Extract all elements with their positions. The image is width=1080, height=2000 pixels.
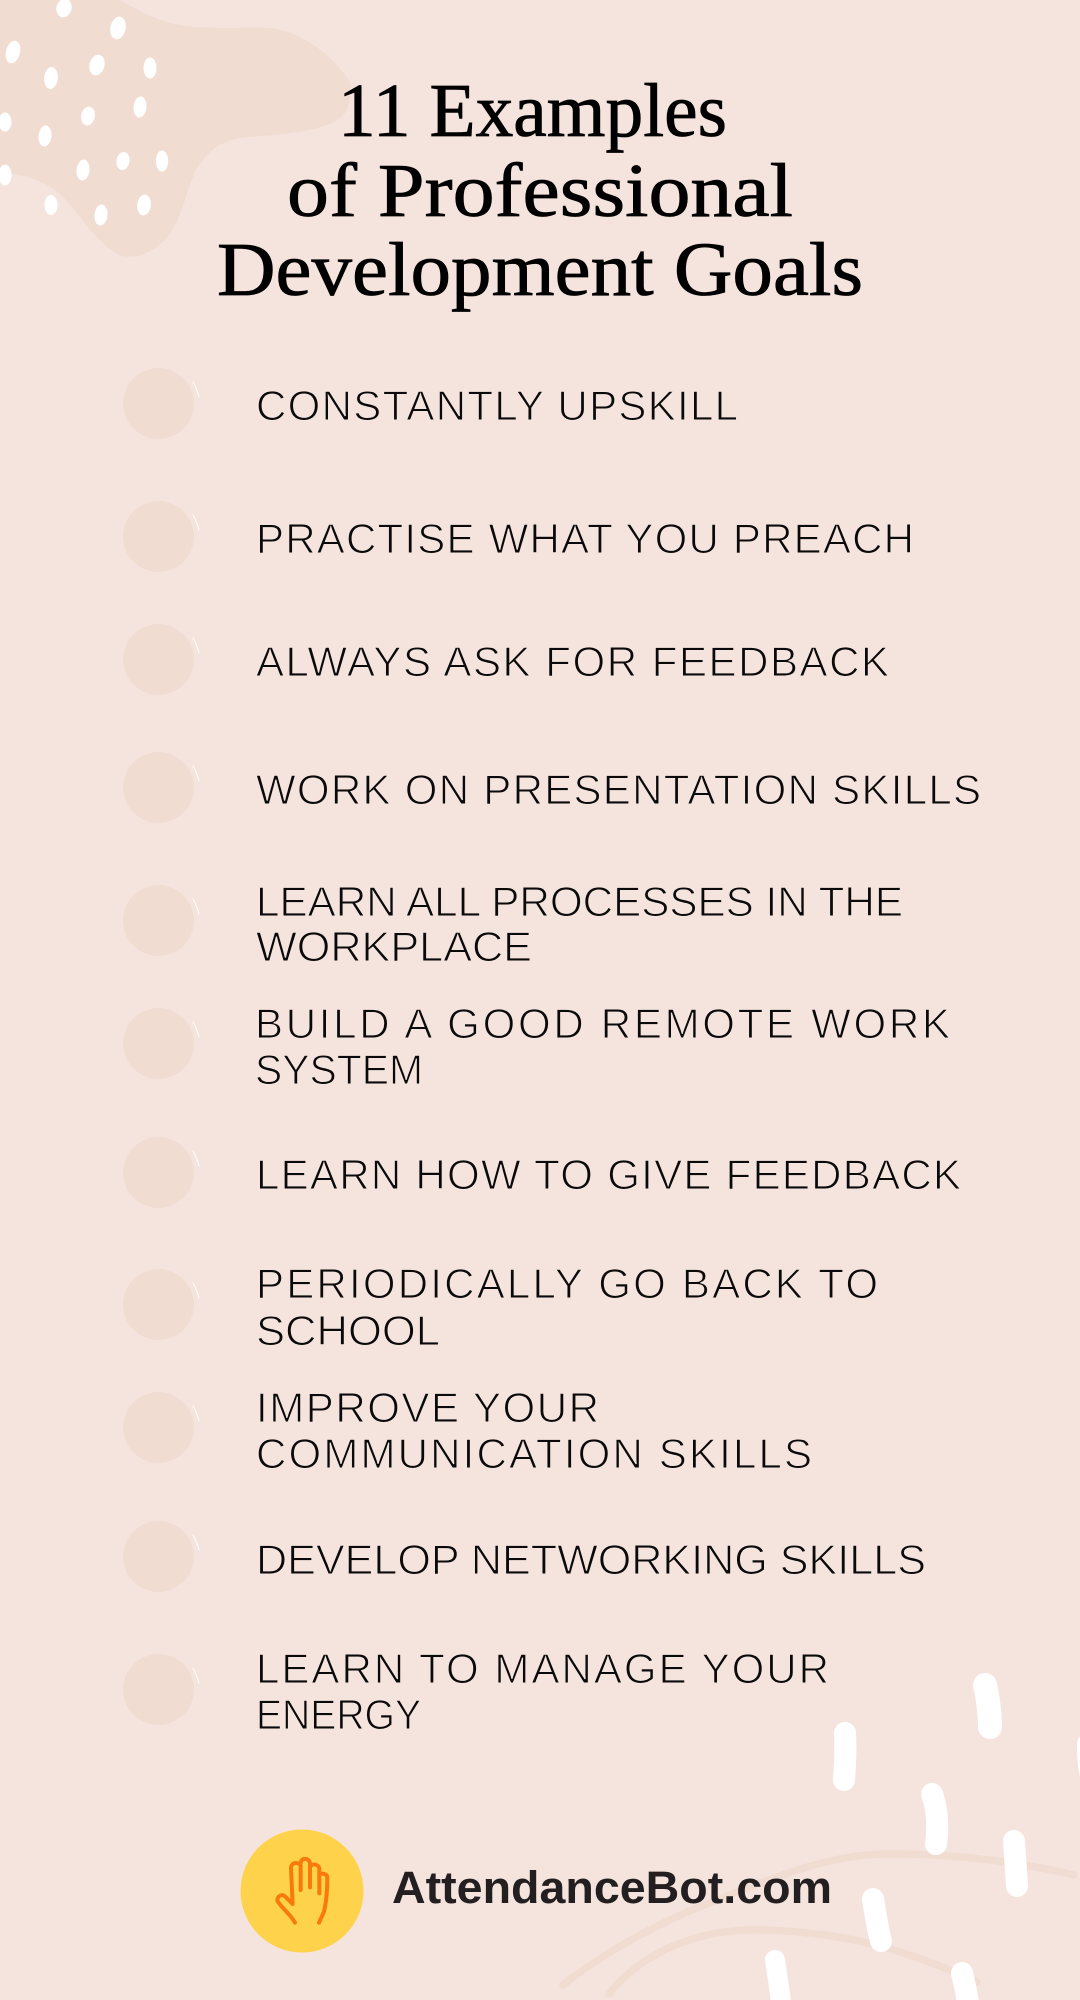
list item 8: Periodically go back to school: PERIODICALLY GO BACK TO <box>256 1260 878 1307</box>
list item 1: Constantly upskill: CONSTANTLY UPSKILL <box>256 382 738 429</box>
list item 2: Practise what you preach: PRACTISE WHAT YOU PREACH <box>256 515 914 562</box>
bullet 11 <box>123 1654 199 1725</box>
decoration: top-left blob with white dots <box>0 0 351 257</box>
bullet 10 <box>123 1521 199 1592</box>
bullet 3 <box>123 624 199 695</box>
list item 5: Learn all processes in the workplace: LEARN ALL PROCESSES IN THE <box>256 878 903 925</box>
list item 3: Always ask for feedback <box>123 624 889 695</box>
bullet 6 <box>123 1008 199 1079</box>
logo: AttendanceBot <box>240 1830 832 1952</box>
list item 6: Build a good remote work system: BUILD A GOOD REMOTE WORK <box>255 1000 950 1047</box>
title: of Professional <box>287 149 793 233</box>
list item 5: Learn all processes in the workplace: WORKPLACE <box>256 923 532 970</box>
bullet 2 <box>123 501 199 572</box>
list item 7: Learn how to give feedback: LEARN HOW TO GIVE FEEDBACK <box>256 1151 961 1198</box>
list item 11: Learn to manage your energy <box>123 1645 829 1738</box>
list item 2: Practise what you preach <box>123 501 914 572</box>
bullet 9 <box>123 1392 199 1463</box>
list item 11: Learn to manage your energy: LEARN TO MANAGE YOUR <box>256 1645 829 1692</box>
bullet 5 <box>123 885 199 956</box>
list item 5: Learn all processes in the workplace <box>123 878 903 970</box>
list item 3: Always ask for feedback: ALWAYS ASK FOR FEEDBACK <box>256 638 889 685</box>
list item 6: Build a good remote work system: SYSTEM <box>255 1046 423 1093</box>
list item 1: Constantly upskill <box>123 368 738 439</box>
decoration: bottom-right curves <box>563 1854 1074 1994</box>
list item 10: Develop networking skills: DEVELOP NETWORKING SKILLS <box>256 1536 926 1583</box>
bullet 1 <box>123 368 199 439</box>
list item 11: Learn to manage your energy: ENERGY <box>256 1691 421 1738</box>
list item 10: Develop networking skills <box>123 1521 926 1592</box>
title <box>217 69 863 312</box>
list item 4: Work on presentation skills <box>123 752 981 823</box>
list item 7: Learn how to give feedback <box>123 1137 961 1208</box>
bullet 7 <box>123 1137 199 1208</box>
list item 8: Periodically go back to school: SCHOOL <box>256 1307 440 1354</box>
bullet 4 <box>123 752 199 823</box>
title: 11 Examples <box>338 69 727 153</box>
bullet 8 <box>123 1269 199 1340</box>
decoration: bottom-right white dashes <box>775 1685 1080 2000</box>
list item 9: Improve your communication skills <box>123 1384 812 1477</box>
list item 9: Improve your communication skills: IMPROVE YOUR <box>256 1384 599 1431</box>
icon: yellow circle with raised hand <box>240 1830 364 1952</box>
list item 8: Periodically go back to school <box>123 1260 878 1354</box>
list item 6: Build a good remote work system <box>123 1000 950 1093</box>
logo text: AttendanceBot.com <box>392 1862 832 1913</box>
list item 9: Improve your communication skills: COMMUNICATION SKILLS <box>256 1430 812 1477</box>
list item 4: Work on presentation skills: WORK ON PRESENTATION SKILLS <box>256 766 981 813</box>
title: Development Goals <box>217 228 863 312</box>
